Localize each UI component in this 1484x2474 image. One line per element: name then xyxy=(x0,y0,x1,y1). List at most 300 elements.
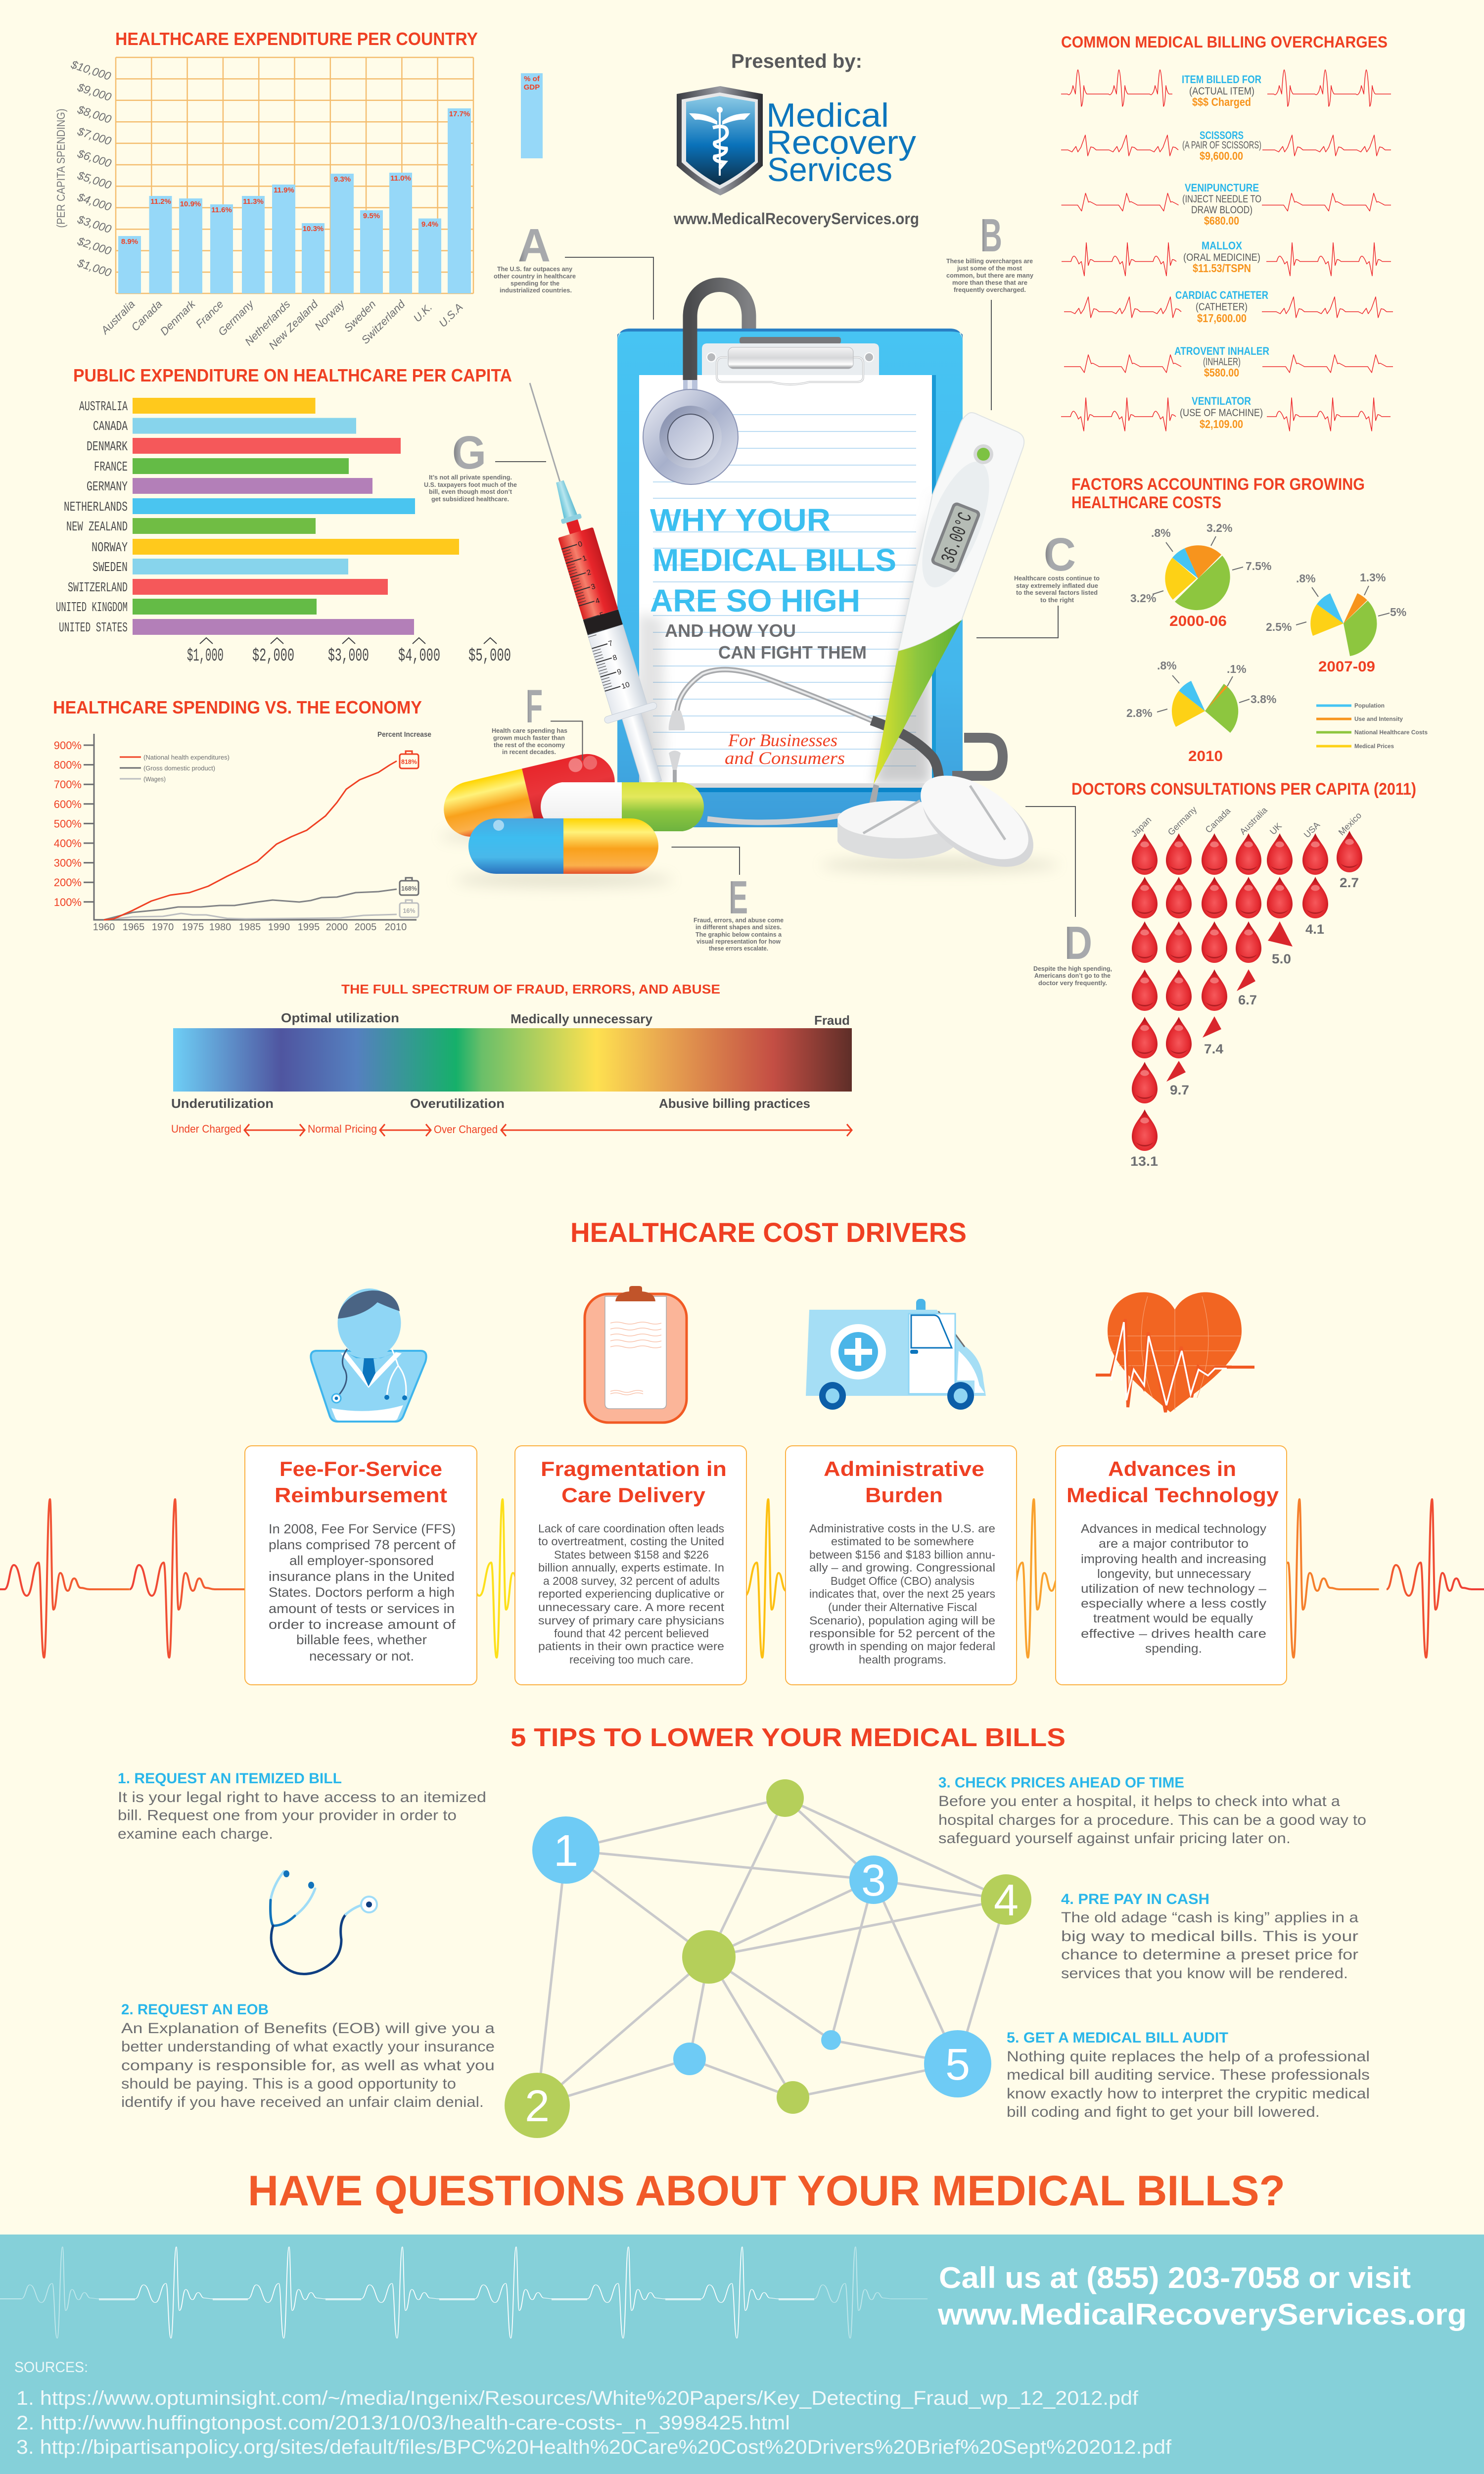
contact text: Call us at (855) 203-7058 or visit xyxy=(939,2261,1411,2294)
clipboard headline: MEDICAL BILLS xyxy=(652,542,896,578)
chart axes xyxy=(84,734,417,920)
tip 5: 5. GET A MEDICAL BILL AUDIT xyxy=(1007,2030,1228,2046)
x axis labels: 1975 xyxy=(182,922,204,933)
thermometer display xyxy=(930,501,981,573)
country labels: Netherlands xyxy=(242,298,293,348)
icon: ambulance xyxy=(806,1299,986,1410)
heading: healthcare cost drivers: HEALTHCARE COST DRIVERS xyxy=(570,1217,967,1248)
country labels: DENMARK xyxy=(87,440,128,455)
x axis labels: 1970 xyxy=(152,922,174,933)
country labels: Germany xyxy=(216,297,257,338)
country labels: CANADA xyxy=(93,420,128,434)
country labels: Denmark xyxy=(158,297,198,338)
card body text: to overtreatment, costing the United xyxy=(538,1535,724,1548)
heading xyxy=(1071,475,1365,512)
icon: shield xyxy=(677,86,763,195)
callout B: These billing overcharges are xyxy=(946,257,1033,265)
callout A xyxy=(494,219,653,320)
tip 5: Nothing quite replaces the help of a professional xyxy=(1007,2048,1370,2065)
line: wages xyxy=(104,913,397,920)
callout C: stay extremely inflated due xyxy=(1016,582,1098,589)
y axis labels: 100% xyxy=(54,896,82,908)
tip 2: better understanding of what exactly your insurance xyxy=(121,2039,495,2055)
icon: doctor xyxy=(311,1288,426,1422)
country labels: NORWAY xyxy=(92,541,128,556)
tip 3: hospital charges for a procedure. This can be a good way to xyxy=(938,1812,1366,1828)
tip 4: chance to determine a preset price for xyxy=(1061,1947,1358,1963)
legend: % of GDP: % of xyxy=(524,75,540,83)
card body text: order to increase amount of xyxy=(269,1617,456,1632)
bar value labels: 11.6% xyxy=(211,206,232,214)
drops: USA 4.1: 4.1 xyxy=(1305,922,1324,937)
callout B: B xyxy=(980,209,1002,262)
card body text: all employer-sponsored xyxy=(289,1553,434,1568)
syringe: 5 xyxy=(599,611,605,620)
row: scissors: $9,600.00 xyxy=(1200,149,1243,162)
card body text: responsible for 52 percent of the xyxy=(809,1627,995,1640)
pricing scale with arrows xyxy=(171,1123,852,1136)
y axis labels: 300% xyxy=(54,857,82,869)
tip 2: should be paying. This is a good opportunity to xyxy=(121,2076,456,2092)
callout E xyxy=(672,847,784,952)
heading: HEALTHCARE COSTS xyxy=(1071,493,1221,512)
heading: HEALTHCARE EXPENDITURE PER COUNTRY xyxy=(115,29,478,49)
sources: 2. http://www.huffingtonpost.com/2013/10/03/health-care-costs-_n_3998425.html xyxy=(16,2412,790,2434)
pie chart 2007-09: 2.5% xyxy=(1266,620,1292,633)
node 2: 2 xyxy=(525,2082,550,2131)
panel: factors accounting for growing healthcare costs xyxy=(1071,475,1428,764)
card: fee-for-service reimbursement xyxy=(245,1446,477,1685)
pie chart 2010 xyxy=(1126,659,1276,764)
callout E: Fraud, errors, and abuse come xyxy=(694,916,784,924)
country labels: Germany xyxy=(1166,805,1199,837)
card body text: Administrative costs in the U.S. are xyxy=(809,1522,995,1535)
card body text: are a major contributor to xyxy=(1099,1537,1249,1551)
pie chart 2000-06: 3.2% xyxy=(1130,592,1156,605)
drops: Canada 7.4: 7.4 xyxy=(1204,1042,1223,1056)
callout E: The graphic below contains a xyxy=(696,931,782,938)
bars xyxy=(133,398,459,635)
spectrum labels: Medically unnecessary xyxy=(510,1011,653,1026)
icon: clipboard xyxy=(585,1286,687,1423)
country labels: New Zealand xyxy=(266,297,321,352)
callout A: industrialized countries. xyxy=(500,286,572,294)
card body text: (under their Alternative Fiscal xyxy=(828,1601,977,1614)
pricing scale with arrows: Over Charged xyxy=(434,1123,498,1136)
panel: healthcare spending vs the economy xyxy=(53,697,431,933)
pie chart 2010: 3.8% xyxy=(1251,693,1276,706)
node 5: 5 xyxy=(945,2040,970,2090)
logo: Medical Recovery Services: Recovery xyxy=(766,124,916,161)
node 3: 3 xyxy=(861,1856,886,1905)
callout G: bill, even though most don’t xyxy=(429,488,512,495)
footer band xyxy=(0,2235,1484,2474)
tip 1: It is your legal right to have access to an itemized xyxy=(118,1789,486,1806)
callout F xyxy=(492,680,583,761)
drops: Australia 6.7: 6.7 xyxy=(1238,993,1257,1007)
pricing scale with arrows: Under Charged xyxy=(171,1123,241,1135)
chart legend: (Wages) xyxy=(143,775,166,783)
row: mallox: $11.53/TSPN xyxy=(1193,262,1251,275)
pie chart 2010: .8% xyxy=(1157,659,1177,672)
row: item billed for: (ACTUAL ITEM) xyxy=(1189,86,1254,97)
paper clip plate xyxy=(702,337,879,384)
card: fee-for-service reimbursement: Fee-For-Service xyxy=(279,1457,442,1480)
logo: Medical Recovery Services xyxy=(677,86,916,195)
card: advances in medical technology xyxy=(1056,1446,1287,1685)
pie chart 2007-09: .8% xyxy=(1296,572,1316,585)
tip 4 xyxy=(1061,1891,1358,1982)
y axis labels: 400% xyxy=(54,837,82,850)
row: atrovent inhaler: (INHALER) xyxy=(1203,356,1241,368)
logo: Medical Recovery Services: Services xyxy=(767,151,892,189)
row: item billed for xyxy=(1061,70,1391,108)
tip 3: Before you enter a hospital, it helps to check into what a xyxy=(938,1793,1340,1809)
y axis dollar labels: $9,000 xyxy=(76,80,113,103)
drops: Mexico 2.7: 2.7 xyxy=(1340,875,1359,890)
pie legend: Population xyxy=(1354,702,1385,709)
pie chart 2000-06: 7.5% xyxy=(1246,560,1271,572)
contact text xyxy=(937,2261,1467,2331)
tip 4: big way to medical bills. This is your xyxy=(1061,1928,1358,1945)
lower stethoscope tube xyxy=(669,669,939,822)
callout G: U.S. taxpayers foot much of the xyxy=(424,481,517,488)
tip 4: services that you know will be rendered. xyxy=(1061,1965,1348,1982)
card body text: States between $158 and $226 xyxy=(554,1548,709,1561)
country labels: SWITZERLAND xyxy=(68,581,128,596)
x axis labels: $3,000 xyxy=(328,646,369,666)
card: advances in medical technology: Medical Technology xyxy=(1067,1483,1279,1507)
legend: % of GDP xyxy=(521,73,543,158)
clipboard headline: ARE SO HIGH xyxy=(650,583,860,618)
icon: stethoscope xyxy=(271,1870,377,1974)
syringe: 10 xyxy=(620,680,631,691)
bar value labels: 9.3% xyxy=(334,175,351,184)
network edges xyxy=(537,1798,1006,2105)
callout D: Americans don’t go to the xyxy=(1034,972,1111,979)
call to action heading: HAVE QUESTIONS ABOUT YOUR MEDICAL BILLS? xyxy=(248,2167,1285,2215)
paper bottom band xyxy=(639,783,963,792)
card body text: indicates that, over the next 25 years xyxy=(809,1587,995,1600)
drops: Australia 6.7 xyxy=(1236,833,1261,1007)
x axis labels: 2000 xyxy=(326,922,348,933)
card: advances in medical technology: Advances in xyxy=(1108,1457,1236,1480)
callout A: A xyxy=(518,219,551,272)
card body text: longevity, but unnecessary xyxy=(1097,1567,1252,1581)
country labels: USA xyxy=(1302,820,1322,840)
big pulse lines behind cards xyxy=(0,1499,1484,1658)
callout F: grown much faster than xyxy=(493,734,565,741)
panel: common medical billing overcharges xyxy=(1061,33,1393,431)
heading: 5 tips: 5 TIPS TO LOWER YOUR MEDICAL BILLS xyxy=(510,1723,1066,1752)
badge: 818% xyxy=(400,751,418,768)
callout D: Despite the high spending, xyxy=(1033,965,1112,972)
spectrum labels: Overutilization xyxy=(410,1096,505,1111)
x axis labels: $4,000 xyxy=(398,646,440,666)
tip 2: company is responsible for, as well as what you xyxy=(121,2057,495,2074)
tip 3 xyxy=(938,1774,1366,1847)
country labels xyxy=(1129,805,1363,840)
clipboard subhead: CAN FIGHT THEM xyxy=(718,642,867,663)
card body text: Scenario), population aging will be xyxy=(809,1614,995,1627)
x axis labels xyxy=(187,638,511,666)
callout B: more than these that are xyxy=(952,279,1027,286)
card body text: found that 42 percent believed xyxy=(554,1627,709,1640)
node 2 xyxy=(505,2073,570,2138)
bar value labels: 8.9% xyxy=(121,238,138,246)
legend: % of GDP: GDP xyxy=(524,83,540,92)
badge: 16% xyxy=(400,900,418,917)
x axis labels: 2010 xyxy=(385,922,407,933)
y axis title: (PER CAPITA SPENDING) xyxy=(54,109,67,228)
script tagline xyxy=(725,730,845,768)
country labels: UK xyxy=(1268,821,1284,837)
callout F: F xyxy=(526,680,543,733)
paper xyxy=(639,375,932,783)
card body text: between $156 and $183 billion annu- xyxy=(809,1548,995,1561)
badge: 818%: 818% xyxy=(401,759,417,765)
callout B: just some of the most xyxy=(957,264,1022,272)
callout D: doctor very frequently. xyxy=(1038,979,1107,987)
tip 2 xyxy=(121,2001,495,2110)
x axis labels: 1985 xyxy=(239,922,261,933)
country labels: SWEDEN xyxy=(93,561,128,575)
x axis labels: 1980 xyxy=(209,922,231,933)
pricing scale with arrows: Normal Pricing xyxy=(308,1123,377,1135)
tip 5: bill coding and fight to get your bill lowered. xyxy=(1007,2104,1320,2120)
syringe: 3 xyxy=(590,582,597,591)
callout F: in recent decades. xyxy=(502,748,556,756)
panel: healthcare expenditure per country xyxy=(54,29,543,352)
row: atrovent inhaler xyxy=(1064,345,1393,379)
row: atrovent inhaler: ATROVENT INHALER xyxy=(1174,345,1269,357)
card body text: utilization of new technology – xyxy=(1081,1582,1266,1596)
pie chart 2000-06: 2000-06 xyxy=(1169,613,1227,629)
clipboard headline: WHY YOUR xyxy=(650,502,831,538)
card body text: Lack of care coordination often leads xyxy=(538,1522,724,1535)
card body text: estimated to be somewhere xyxy=(831,1535,974,1548)
chart legend: (Gross domestic product) xyxy=(143,764,215,772)
row: mallox xyxy=(1062,239,1391,276)
presented by: Presented by: xyxy=(731,50,862,72)
card body text: Advances in medical technology xyxy=(1081,1522,1267,1536)
clipboard subhead: AND HOW YOU xyxy=(665,620,796,641)
card: fragmentation in care delivery: Fragmentation in xyxy=(541,1457,727,1480)
unnumbered nodes xyxy=(673,1779,841,2114)
callout B: common, but there are many xyxy=(946,272,1034,279)
callout G xyxy=(424,427,546,503)
country labels: Switzerland xyxy=(359,297,408,346)
node 3 xyxy=(849,1856,898,1905)
tip 3: safeguard yourself against unfair pricing later on. xyxy=(938,1830,1291,1847)
row: item billed for: ITEM BILLED FOR xyxy=(1182,73,1261,86)
card: fee-for-service reimbursement: Reimbursement xyxy=(275,1483,447,1507)
syringe: 1 xyxy=(581,554,588,563)
tip 2: 2. REQUEST AN EOB xyxy=(121,2001,269,2018)
tablets xyxy=(837,759,1048,885)
card body text: health programs. xyxy=(859,1653,946,1666)
card body text: In 2008, Fee For Service (FFS) xyxy=(269,1522,456,1536)
row: venipuncture xyxy=(1062,182,1391,227)
y axis labels: 600% xyxy=(54,798,82,810)
row: mallox: (ORAL MEDICINE) xyxy=(1183,252,1260,263)
pie legend: National Healthcare Costs xyxy=(1354,729,1428,736)
country labels: Australia xyxy=(1238,805,1270,837)
percent increase label: Percent Increase xyxy=(377,730,431,739)
chart legend: (National health expenditures) xyxy=(143,754,230,761)
country labels: Australia xyxy=(98,298,138,337)
spectrum labels xyxy=(171,1010,850,1111)
tip 4: 4. PRE PAY IN CASH xyxy=(1061,1891,1209,1907)
right loop of stethoscope tube xyxy=(952,738,1003,776)
y axis labels: 500% xyxy=(54,817,82,830)
row: venipuncture: DRAW BLOOD) xyxy=(1191,204,1252,216)
pill: blue and yellow xyxy=(468,818,658,874)
card body text: treatment would be equally xyxy=(1093,1612,1253,1625)
country labels: U.K. xyxy=(411,301,435,325)
row: cardiac catheter: CARDIAC CATHETER xyxy=(1175,289,1268,301)
bars xyxy=(118,108,471,293)
icon: heart with pulse xyxy=(1096,1292,1254,1412)
callout E: in different shapes and sizes. xyxy=(696,923,782,931)
thermometer display: 36.00°C xyxy=(938,510,977,567)
x axis labels: 1995 xyxy=(298,922,320,933)
script tagline: and Consumers xyxy=(725,748,845,768)
network diagram xyxy=(505,1779,1031,2138)
card: administrative burden: Burden xyxy=(865,1483,943,1507)
row: scissors: SCISSORS xyxy=(1200,129,1244,142)
bar value labels: 10.3% xyxy=(303,225,324,233)
drops: Germany 9.7: 9.7 xyxy=(1170,1083,1189,1097)
drops: Japan 13.1: 13.1 xyxy=(1130,1154,1158,1169)
bar value labels: 11.9% xyxy=(274,186,294,194)
y axis labels: 700% xyxy=(54,778,82,791)
spectrum gradient bar xyxy=(173,1028,852,1092)
spectrum labels: Optimal utilization xyxy=(281,1010,399,1025)
y axis dollar labels: $5,000 xyxy=(76,168,113,191)
spectrum labels: Abusive billing practices xyxy=(659,1096,810,1111)
row: ventilator xyxy=(1061,395,1391,431)
clipboard subhead xyxy=(665,620,867,663)
clipboard headline xyxy=(650,502,896,618)
spectrum labels: Fraud xyxy=(814,1013,850,1028)
card body text: effective – drives health care xyxy=(1081,1627,1266,1641)
pie chart 2000-06: 3.2% xyxy=(1206,522,1232,534)
sources: 1. https://www.optuminsight.com/~/media/Ingenix/Resources/White%20Papers/Key_Detecting_Fraud_wp_12_2012.pdf xyxy=(16,2387,1139,2409)
board top edge xyxy=(617,329,963,341)
footer pulse line xyxy=(0,2247,928,2338)
drops: UK 5.0 xyxy=(1267,833,1293,966)
card body text: plans comprised 78 percent of xyxy=(269,1537,456,1552)
drops: USA 4.1 xyxy=(1302,833,1328,937)
callout E: E xyxy=(729,871,748,924)
illustration: clipboard with medical items xyxy=(438,285,1059,887)
country labels xyxy=(56,400,128,636)
panel: doctors consultations per capita xyxy=(1071,780,1416,1169)
script tagline: For Businesses xyxy=(728,730,837,750)
y axis labels: 200% xyxy=(54,876,82,889)
card body text xyxy=(1081,1522,1267,1656)
drops: Canada 7.4 xyxy=(1202,833,1227,1056)
sources: 3. http://bipartisanpolicy.org/sites/default/files/BPC%20Health%20Care%20Cost%20Drivers%20Brief%20Sept%202012.pdf xyxy=(16,2436,1172,2458)
drops: Germany 9.7 xyxy=(1166,833,1192,1097)
card: administrative burden xyxy=(786,1446,1017,1685)
y axis dollar labels: $10,000 xyxy=(69,57,113,83)
callout D: D xyxy=(1065,917,1092,969)
drops: UK 5.0: 5.0 xyxy=(1272,952,1291,966)
row: ventilator: $2,109.00 xyxy=(1200,418,1243,430)
pill: white and green xyxy=(541,782,704,831)
tip 4: The old adage “cash is king” applies in a xyxy=(1061,1909,1358,1926)
badge: 168%: 168% xyxy=(401,885,417,892)
y axis dollar labels: $2,000 xyxy=(76,234,113,257)
card body text xyxy=(538,1522,725,1666)
node 4: 4 xyxy=(994,1876,1019,1925)
row: ventilator: (USE OF MACHINE) xyxy=(1180,407,1263,419)
chart legend xyxy=(120,754,230,783)
syringe: 2 xyxy=(586,568,592,577)
card body text: insurance plans in the United xyxy=(269,1569,455,1584)
heading: THE FULL SPECTRUM OF FRAUD, ERRORS, AND ABUSE xyxy=(341,982,720,997)
country labels: France xyxy=(193,298,226,331)
pill: yellow and red xyxy=(438,749,620,843)
callout B xyxy=(946,209,1034,410)
callout C: Healthcare costs continue to xyxy=(1014,574,1100,582)
country labels: Sweden xyxy=(342,298,378,334)
callout A: spending for the xyxy=(510,280,559,287)
card body text: amount of tests or services in xyxy=(269,1601,455,1616)
card body text: receiving too much care. xyxy=(569,1653,694,1666)
x axis labels: 1960 xyxy=(93,922,115,933)
panel: public expenditure on healthcare per capita xyxy=(56,365,512,666)
row: mallox: MALLOX xyxy=(1202,239,1242,252)
country labels: NEW ZEALAND xyxy=(66,520,128,535)
card: fragmentation in care delivery xyxy=(515,1446,746,1685)
logo: Medical Recovery Services: Medical xyxy=(766,96,889,134)
country labels: Canada xyxy=(129,298,165,333)
tip 3: 3. CHECK PRICES AHEAD OF TIME xyxy=(938,1774,1184,1791)
bar value labels xyxy=(121,110,470,246)
callout B: frequently overcharged. xyxy=(954,286,1026,293)
card body text: Budget Office (CBO) analysis xyxy=(831,1574,974,1587)
row: venipuncture: VENIPUNCTURE xyxy=(1185,182,1259,194)
syringe: 0 xyxy=(577,540,583,549)
paper edge xyxy=(932,375,936,783)
heading: HEALTHCARE SPENDING VS. THE ECONOMY xyxy=(53,697,422,717)
card body text: especially where a less costly xyxy=(1081,1597,1267,1611)
y axis labels xyxy=(54,739,82,908)
card body text: growth in spending on major federal xyxy=(809,1640,995,1653)
sources xyxy=(14,2359,1172,2458)
thermometer xyxy=(869,413,1024,806)
pie chart 2007-09: 5% xyxy=(1390,606,1406,618)
y axis dollar labels xyxy=(69,57,113,279)
bar value labels: 17.7% xyxy=(449,110,470,118)
website url: www.MedicalRecoveryServices.org xyxy=(673,210,919,228)
bar value labels: 9.5% xyxy=(363,212,380,220)
card body text: necessary or not. xyxy=(309,1649,414,1664)
x axis labels: 1990 xyxy=(268,922,290,933)
card body text: survey of primary care physicians xyxy=(538,1614,724,1627)
callout C: to the right xyxy=(1040,596,1074,604)
country labels: Norway xyxy=(312,297,348,333)
syringe: 9 xyxy=(616,667,622,676)
callout E: visual representation for how xyxy=(696,938,781,945)
callout G: get subsidized healthcare. xyxy=(431,495,509,503)
country labels: Canada xyxy=(1204,806,1233,835)
line: national health expenditures xyxy=(104,761,397,920)
callout C: to the several factors listed xyxy=(1016,589,1098,596)
